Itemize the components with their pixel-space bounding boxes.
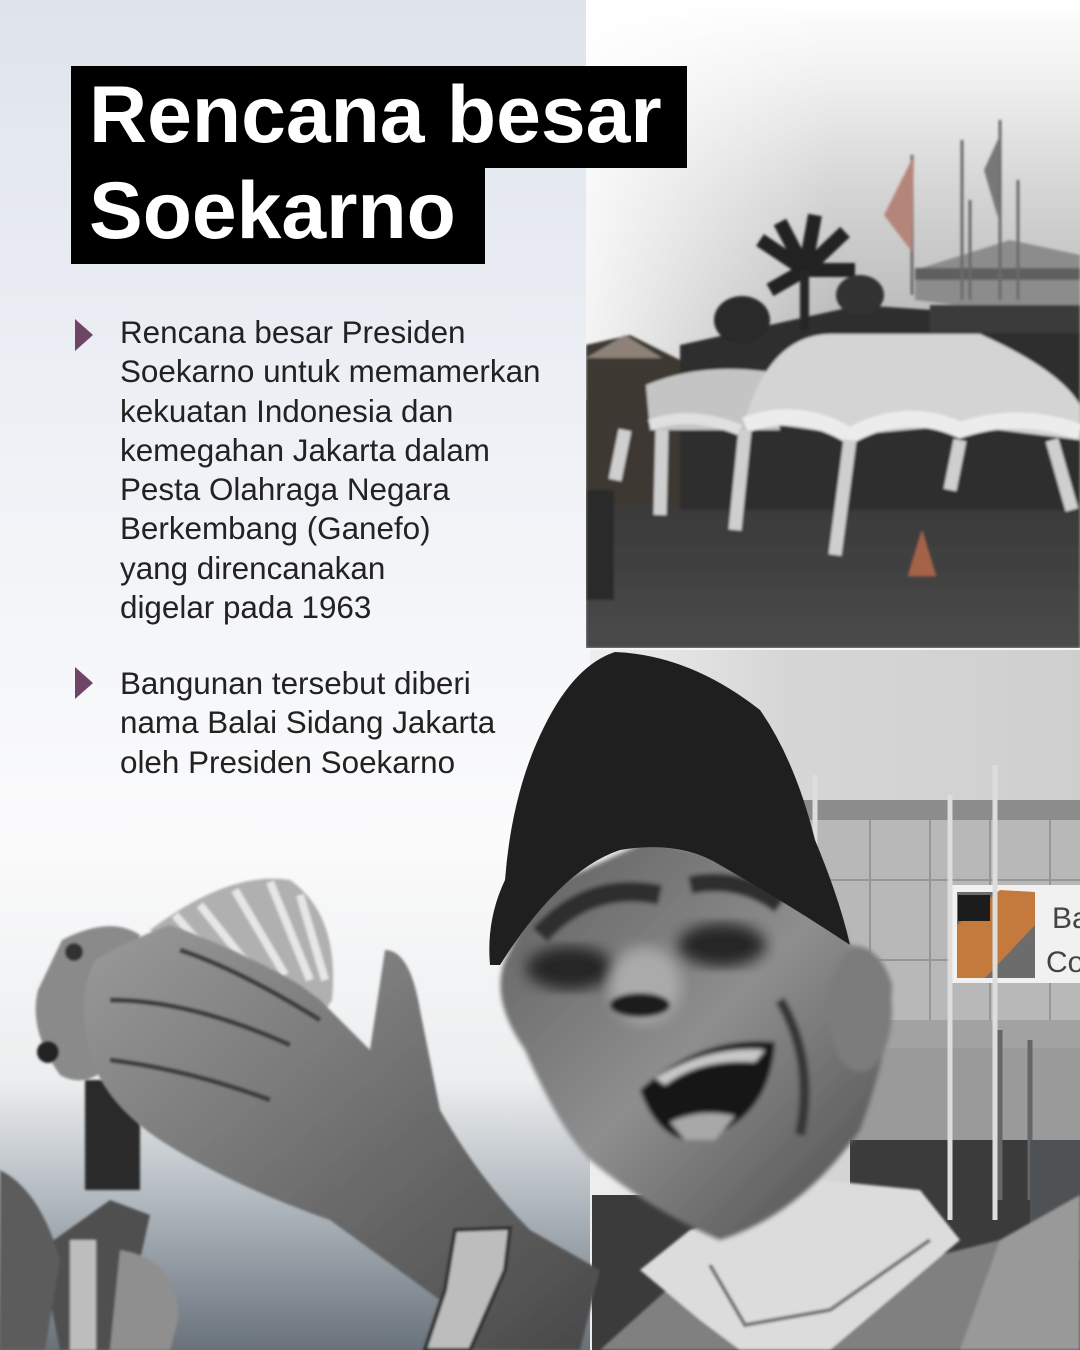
text block 1: Rencana besar Presiden — [120, 315, 466, 350]
text block 1: digelar pada 1963 — [120, 590, 371, 625]
photo: microphone — [0, 879, 333, 1350]
photo: Soekarno black cap — [489, 652, 850, 965]
text block 1: kekuatan Indonesia dan — [120, 394, 453, 429]
title line 1: Rencana besar — [89, 70, 662, 160]
text block 2 — [120, 666, 496, 780]
text block 2: Bangunan tersebut diberi — [120, 666, 471, 701]
text block 1: Pesta Olahraga Negara — [120, 472, 450, 507]
text block 2: oleh Presiden Soekarno — [120, 745, 455, 780]
title line 2: Soekarno — [89, 166, 456, 256]
bullet icon 1 — [75, 319, 93, 351]
text block 1: kemegahan Jakarta dalam — [120, 433, 490, 468]
bullet icon 2 — [75, 667, 93, 699]
text block 2: nama Balai Sidang Jakarta — [120, 705, 495, 740]
photo: building with tents — [586, 0, 1080, 648]
text block 1 — [120, 315, 540, 625]
photo: Soekarno face — [500, 840, 892, 1240]
text block 1: Soekarno untuk memamerkan — [120, 354, 540, 389]
text block 1: yang direncanakan — [120, 551, 385, 586]
text block 1: Berkembang (Ganefo) — [120, 511, 431, 546]
photo: Soekarno suit and collar — [600, 1180, 1080, 1350]
wristwatch — [425, 1228, 510, 1350]
photo: Balai Sidang building — [590, 650, 1080, 1350]
photo: Soekarno hand and arm — [84, 925, 600, 1350]
title — [71, 66, 687, 264]
